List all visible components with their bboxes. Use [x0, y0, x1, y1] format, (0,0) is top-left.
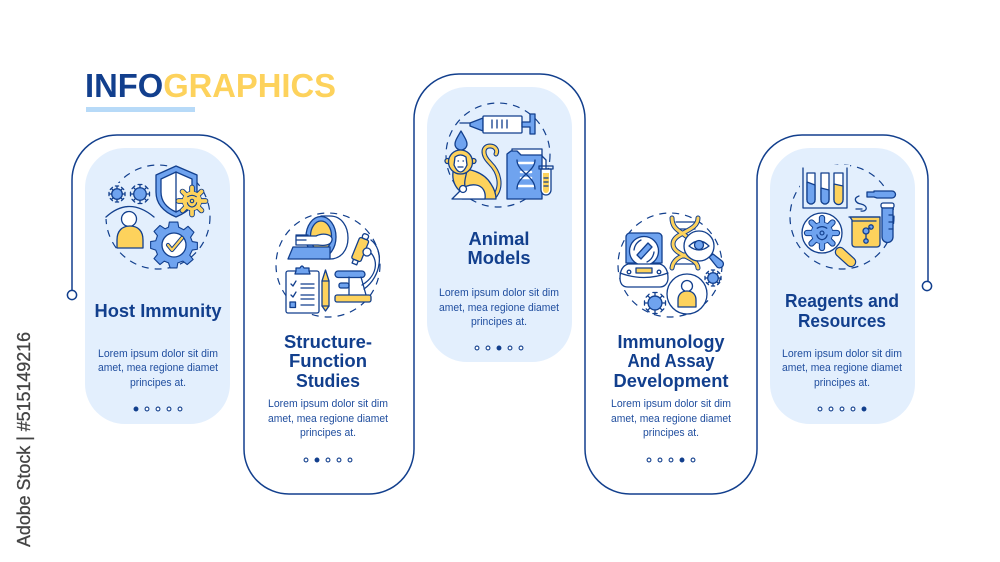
panel: reagents background [770, 148, 915, 424]
text: host immunity description [98, 348, 218, 389]
panel: animal models background [427, 87, 572, 362]
heading: Immunology And Assay Development: And Assay [628, 350, 715, 371]
text: immunology description: amet, mea regione diamet [611, 413, 731, 425]
text: structure-function description: amet, mea regione diamet [268, 413, 388, 425]
text: host immunity description: principes at. [130, 377, 186, 389]
heading: Immunology And Assay Development [614, 331, 728, 391]
icon: structure-function studies [276, 213, 380, 317]
text: host immunity description: Lorem ipsum dolor sit dim [98, 348, 218, 360]
heading: Structure-Function Studies: Structure- [284, 331, 372, 352]
pagination dots: card 4 [647, 458, 695, 462]
text: animal models description: Lorem ipsum dolor sit dim [439, 287, 559, 299]
heading: Reagents and Resources: Reagents and [785, 290, 899, 311]
heading: Animal Models: Animal [468, 228, 530, 249]
text: immunology description [611, 398, 731, 439]
heading: Reagents and Resources [785, 290, 899, 331]
text: animal models description [439, 287, 559, 328]
icon: host immunity [100, 165, 210, 269]
heading: Structure-Function Studies [284, 331, 372, 391]
text: reagents description: amet, mea regione diamet [782, 362, 902, 374]
heading: Animal Models: Models [468, 247, 530, 268]
text: structure-function description [268, 398, 388, 439]
text: reagents description: principes at. [814, 377, 870, 389]
text: reagents description [782, 348, 902, 389]
text: animal models description: amet, mea regione diamet [439, 302, 559, 314]
serpentine outline connecting cards [67, 74, 932, 494]
text: animal models description: principes at. [471, 316, 527, 328]
text: immunology description: principes at. [643, 427, 699, 439]
heading: Host Immunity: Host Immunity [94, 300, 222, 321]
text: reagents description: Lorem ipsum dolor sit dim [782, 348, 902, 360]
icon: reagents and resources [790, 165, 896, 269]
text: structure-function description: Lorem ipsum dolor sit dim [268, 398, 388, 410]
pagination dots: card 3 [475, 346, 523, 350]
title: INFOGRAPHICS: INFOGRAPHICS [85, 67, 336, 104]
panel: host immunity background [85, 148, 230, 424]
text: host immunity description: amet, mea regione diamet [98, 362, 218, 374]
heading: Reagents and Resources: Resources [798, 310, 886, 331]
heading: Structure-Function Studies: Function [289, 350, 367, 371]
pagination dots: card 1 [134, 407, 182, 411]
icon: animal models [445, 103, 553, 207]
icon: immunology and assay development [618, 213, 723, 317]
heading: Immunology And Assay Development: Development [614, 370, 728, 391]
stock label: Adobe Stock | #515149216 [14, 332, 34, 547]
heading: Immunology And Assay Development: Immunology [618, 331, 725, 352]
text: immunology description: Lorem ipsum dolor sit dim [611, 398, 731, 410]
heading: Animal Models [468, 228, 530, 268]
pagination dots: card 5 [818, 407, 866, 411]
text: structure-function description: principes at. [300, 427, 356, 439]
pagination dots: card 2 [304, 458, 352, 462]
heading: Structure-Function Studies: Studies [296, 370, 360, 391]
